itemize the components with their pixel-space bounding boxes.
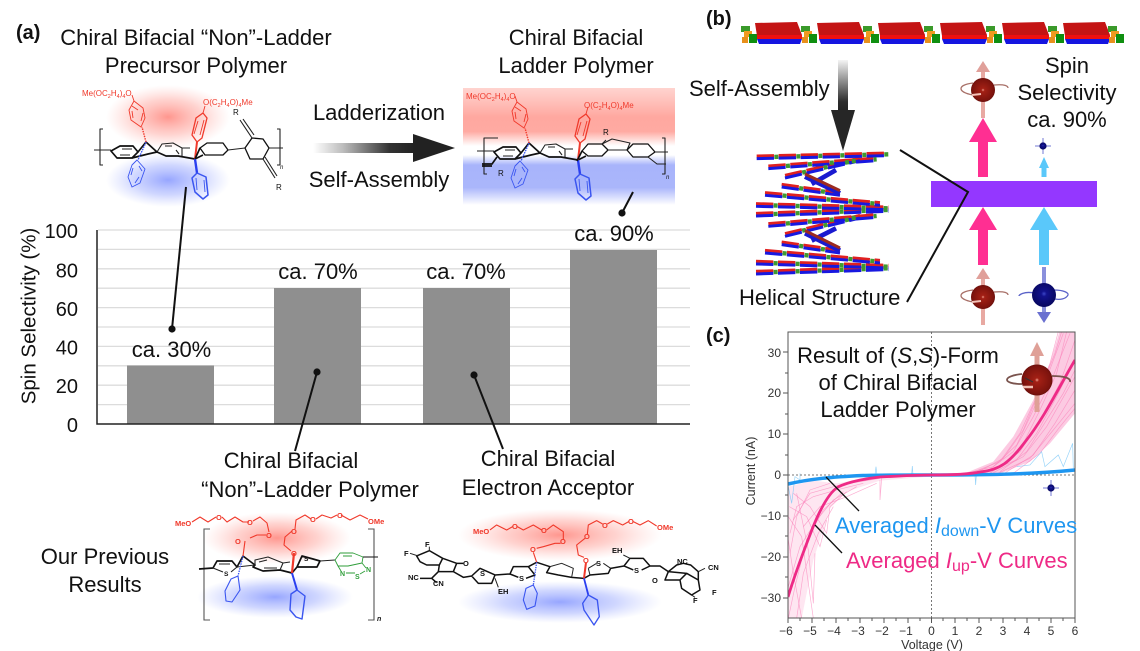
chart title: Ladder Polymer — [820, 397, 976, 422]
label: spin selectivity ca. 90%: ca. 90% — [1027, 107, 1107, 132]
molecule: non-ladder polymer with benzothiadiazole: N — [366, 567, 371, 574]
molecule: non-ladder polymer with benzothiadiazole: S — [355, 574, 360, 581]
molecule: non-ladder precursor polymer: R — [276, 183, 282, 192]
molecule: non-ladder precursor polymer: 4 — [238, 103, 242, 109]
bar value labels: ca. 70% — [426, 259, 506, 284]
bar: 90% — [570, 250, 657, 424]
label: chiral bifacial electron acceptor: Chiral Bifacial — [481, 446, 615, 471]
label: averaged I-up curves: up — [952, 558, 970, 575]
molecule: chiral bifacial electron acceptor: NC — [408, 573, 419, 582]
molecule: non-ladder polymer with benzothiadiazole: n — [377, 616, 381, 623]
molecule: non-ladder precursor polymer: ) — [120, 89, 123, 98]
arrow: spin-up incoming — [969, 207, 997, 265]
y axis tick labels: 60 — [56, 299, 78, 321]
label: self-assembly (a): Self-Assembly — [309, 167, 449, 192]
label: spin selectivity ca. 90%: Spin — [1045, 53, 1089, 78]
x axis tick labels: −2 — [875, 624, 889, 638]
molecule: non-ladder precursor polymer: 4 — [122, 94, 125, 100]
molecule: non-ladder polymer with benzothiadiazole: O — [291, 527, 297, 536]
bar chart: spin selectivity — [18, 221, 690, 437]
axes frame — [788, 332, 1075, 618]
x axis tick labels: −4 — [827, 624, 841, 638]
x axis tick labels: 5 — [1048, 624, 1055, 638]
molecule: non-ladder polymer with benzothiadiazole: O — [247, 518, 253, 527]
molecule: ladder polymer: R — [603, 128, 609, 137]
leader lines with dots — [168, 187, 633, 451]
label: chiral bifacial electron acceptor: Electron Acceptor — [462, 475, 634, 500]
y axis title: Spin Selectivity (%) — [18, 228, 40, 404]
molecule: ladder polymer: 4 — [608, 106, 611, 112]
molecule: ladder polymer: O) — [611, 101, 620, 110]
label: spin selectivity ca. 90%: Selectivity — [1017, 80, 1117, 105]
icon: large spin-up electron — [1007, 342, 1070, 412]
x axis tick labels: −5 — [803, 624, 817, 638]
molecule: chiral bifacial electron acceptor: O — [652, 576, 658, 585]
molecule: chiral bifacial electron acceptor: O — [583, 556, 589, 565]
label: our previous results: Results — [68, 572, 142, 597]
molecule: non-ladder polymer with benzothiadiazole — [175, 511, 384, 623]
molecule: ladder polymer: 4 — [619, 106, 623, 112]
molecule: chiral bifacial electron acceptor: S — [634, 566, 639, 575]
y axis tick labels: 40 — [56, 338, 78, 360]
molecule: non-ladder polymer with benzothiadiazole: S — [304, 556, 309, 563]
molecule: ladder polymer: n — [666, 175, 670, 181]
leader lines to averaged curves — [815, 477, 859, 553]
molecule: ladder polymer: Me(OC — [466, 92, 492, 101]
label: averaged I-up curves: -V Curves — [970, 548, 1068, 573]
molecule: non-ladder polymer with benzothiadiazole: O — [337, 511, 343, 520]
molecule: chiral bifacial electron acceptor: CN — [433, 579, 444, 588]
helical structure model — [756, 153, 888, 274]
pink raw curves — [788, 330, 1075, 618]
molecule: chiral bifacial electron acceptor: O — [463, 559, 469, 568]
blue raw curves — [788, 443, 1073, 503]
x axis tick labels: 4 — [1024, 624, 1031, 638]
y axis tick labels: 10 — [768, 427, 781, 441]
molecule: ladder polymer: Me — [623, 101, 634, 110]
x axis tick labels: −3 — [851, 624, 865, 638]
purple chiral layer — [931, 181, 1097, 207]
molecule: chiral bifacial electron acceptor: F — [404, 549, 409, 558]
x axis tick labels — [779, 624, 1079, 638]
label: self-assembly (b): Self-Assembly — [689, 76, 830, 101]
I-V chart — [744, 330, 1079, 651]
heading: non-ladder precursor polymer: Chiral Bifacial “Non”-Ladder — [60, 25, 332, 50]
molecule: ladder polymer — [463, 88, 675, 205]
y axis tick labels: −10 — [761, 509, 781, 523]
bar value labels: ca. 90% — [574, 221, 654, 246]
molecule: ladder polymer: 4 — [506, 97, 509, 103]
bar value labels: ca. 30% — [132, 337, 211, 362]
label: chiral bifacial non-ladder polymer: “Non”-Ladder Polymer — [201, 477, 419, 502]
y axis tick labels — [45, 221, 78, 437]
molecule: chiral bifacial electron acceptor: OMe — [657, 523, 673, 532]
molecule: non-ladder precursor polymer: H — [221, 98, 227, 107]
molecule: chiral bifacial electron acceptor: O — [512, 522, 518, 531]
molecule: non-ladder polymer with benzothiadiazole: O — [235, 537, 241, 546]
y axis tick labels: 0 — [774, 468, 781, 482]
x axis tick labels: 1 — [952, 624, 959, 638]
molecule: ladder polymer: O(C — [584, 101, 599, 110]
zero guide lines — [788, 332, 1075, 618]
x axis tick labels: 6 — [1072, 624, 1079, 638]
x axis tick labels: 3 — [1000, 624, 1007, 638]
molecule: chiral bifacial electron acceptor: EH — [498, 587, 508, 596]
averaged I-up curve — [788, 360, 1075, 597]
x axis tick labels: −1 — [899, 624, 913, 638]
chart title: Result of (S,S)-Form — [797, 343, 999, 368]
y axis tick labels: 80 — [56, 260, 78, 282]
molecule: non-ladder precursor polymer: 2 — [218, 103, 221, 109]
label: helical structure: Helical Structure — [739, 285, 900, 310]
molecule: chiral bifacial electron acceptor: EH — [612, 546, 622, 555]
molecule: non-ladder precursor polymer: 2 — [108, 94, 111, 100]
x axis tick labels: 0 — [928, 624, 935, 638]
molecule: chiral bifacial electron acceptor — [404, 509, 719, 625]
molecule: non-ladder precursor polymer: O — [125, 89, 132, 98]
y axis tick labels: −30 — [761, 591, 781, 605]
molecule: ladder polymer: H — [602, 101, 608, 110]
molecule: ladder polymer: 2 — [492, 97, 495, 103]
label: averaged I-down curves: -V Curves — [979, 513, 1077, 538]
chart axes — [97, 230, 690, 424]
heading: ladder polymer: Chiral Bifacial — [509, 25, 643, 50]
molecule: chiral bifacial electron acceptor: MeO — [473, 527, 489, 536]
molecule: non-ladder precursor polymer: Me — [242, 98, 253, 107]
panel label (a): (a) — [16, 22, 40, 44]
label: ladderization: Ladderization — [313, 100, 445, 125]
molecule: chiral bifacial electron acceptor: NC — [677, 557, 688, 566]
molecule: non-ladder polymer with benzothiadiazole: S — [224, 571, 229, 578]
arrow: ladderization — [313, 134, 455, 162]
molecule: chiral bifacial electron acceptor: S — [596, 559, 601, 568]
label: averaged I-down curves: Averaged I — [835, 513, 941, 538]
molecule: non-ladder polymer with benzothiadiazole: O — [310, 515, 316, 524]
molecule: non-ladder precursor polymer: 4 — [227, 103, 230, 109]
molecule: non-ladder polymer with benzothiadiazole: OMe — [368, 517, 384, 526]
molecule: chiral bifacial electron acceptor: O — [530, 545, 536, 554]
molecule: non-ladder polymer with benzothiadiazole: O — [291, 549, 297, 558]
averaged I-down curve — [788, 470, 1075, 484]
molecule: chiral bifacial electron acceptor: O — [560, 537, 566, 546]
molecule: non-ladder polymer with benzothiadiazole: O — [266, 531, 272, 540]
icon: spin-down electron bottom — [1019, 267, 1068, 323]
molecule: chiral bifacial electron acceptor: S — [519, 574, 524, 583]
x axis tick labels: −6 — [779, 624, 793, 638]
icon: spin-up electron top — [961, 61, 1008, 118]
molecule: non-ladder precursor polymer: n — [280, 165, 284, 171]
molecule: non-ladder precursor polymer: H — [111, 89, 117, 98]
molecule: chiral bifacial electron acceptor: O — [541, 526, 547, 535]
molecule: chiral bifacial electron acceptor: CN — [708, 563, 719, 572]
y axis tick labels: −20 — [761, 550, 781, 564]
molecule: chiral bifacial electron acceptor: O — [584, 532, 590, 541]
molecule: ladder polymer: R — [498, 169, 504, 178]
molecule: ladder polymer: 4 — [501, 97, 504, 103]
y axis tick labels: 20 — [56, 376, 78, 398]
molecule: chiral bifacial electron acceptor: O — [602, 521, 608, 530]
y axis tick labels: 20 — [768, 386, 781, 400]
chart title: of Chiral Bifacial — [819, 370, 977, 395]
arrow: spin-down incoming — [1030, 207, 1058, 265]
leader lines to purple layer — [900, 150, 968, 302]
molecule: non-ladder precursor polymer: Me(OC — [82, 89, 108, 98]
y axis tick labels: 0 — [67, 415, 78, 437]
panel label (b): (b) — [706, 8, 732, 30]
label: averaged I-up curves: Averaged I — [846, 548, 952, 573]
heading: non-ladder precursor polymer: Precursor Polymer — [105, 53, 287, 78]
molecule: ladder polymer: 2 — [599, 106, 602, 112]
label: chiral bifacial non-ladder polymer: Chiral Bifacial — [224, 448, 358, 473]
polymer ribbon model — [741, 22, 1124, 44]
molecule: chiral bifacial electron acceptor: F — [712, 588, 717, 597]
arrow: spin-up transmitted — [969, 118, 997, 177]
bar value labels: ca. 70% — [278, 259, 358, 284]
molecule: non-ladder precursor polymer: 4 — [117, 94, 120, 100]
label: averaged I-down curves: down — [941, 523, 979, 540]
molecule: non-ladder polymer with benzothiadiazole: O — [216, 513, 222, 522]
molecule: non-ladder polymer with benzothiadiazole: MeO — [175, 519, 191, 528]
icon: small spin-down electron in chart — [1043, 480, 1059, 496]
bar value labels — [132, 221, 654, 362]
molecule: non-ladder precursor polymer — [82, 85, 284, 207]
arrow: self-assembly down — [831, 60, 855, 151]
x axis tick labels: 2 — [976, 624, 983, 638]
bar: 70% acceptor — [423, 288, 510, 424]
molecule: ladder polymer: O — [509, 92, 516, 101]
heading: ladder polymer: Ladder Polymer — [498, 53, 654, 78]
molecule: ladder polymer: H — [495, 92, 501, 101]
label: our previous results: Our Previous — [41, 544, 169, 569]
y axis tick labels — [761, 346, 781, 605]
molecule: chiral bifacial electron acceptor: F — [693, 596, 698, 605]
molecule: chiral bifacial electron acceptor: S — [480, 569, 485, 578]
molecule: chiral bifacial electron acceptor: F — [425, 540, 430, 549]
molecule: non-ladder precursor polymer: O) — [230, 98, 239, 107]
icon: spin-up electron bottom — [961, 268, 1008, 325]
y axis title: Current (nA) — [744, 437, 758, 505]
arrow: spin-down transmitted (small) — [1039, 157, 1049, 177]
molecule: non-ladder precursor polymer: R — [233, 108, 239, 117]
molecule: non-ladder polymer with benzothiadiazole: N — [340, 571, 345, 578]
bar: 30% — [127, 366, 214, 424]
y axis tick labels: 30 — [768, 346, 781, 360]
y axis tick labels: 100 — [45, 221, 78, 243]
molecule: non-ladder precursor polymer: O(C — [203, 98, 218, 107]
axis ticks — [783, 352, 1075, 623]
molecule: chiral bifacial electron acceptor: O — [628, 517, 634, 526]
bar: 70% — [274, 288, 361, 424]
molecule: ladder polymer: ) — [504, 92, 507, 101]
panel label (c): (c) — [706, 325, 730, 347]
icon: small spin-down electron — [1035, 138, 1051, 154]
